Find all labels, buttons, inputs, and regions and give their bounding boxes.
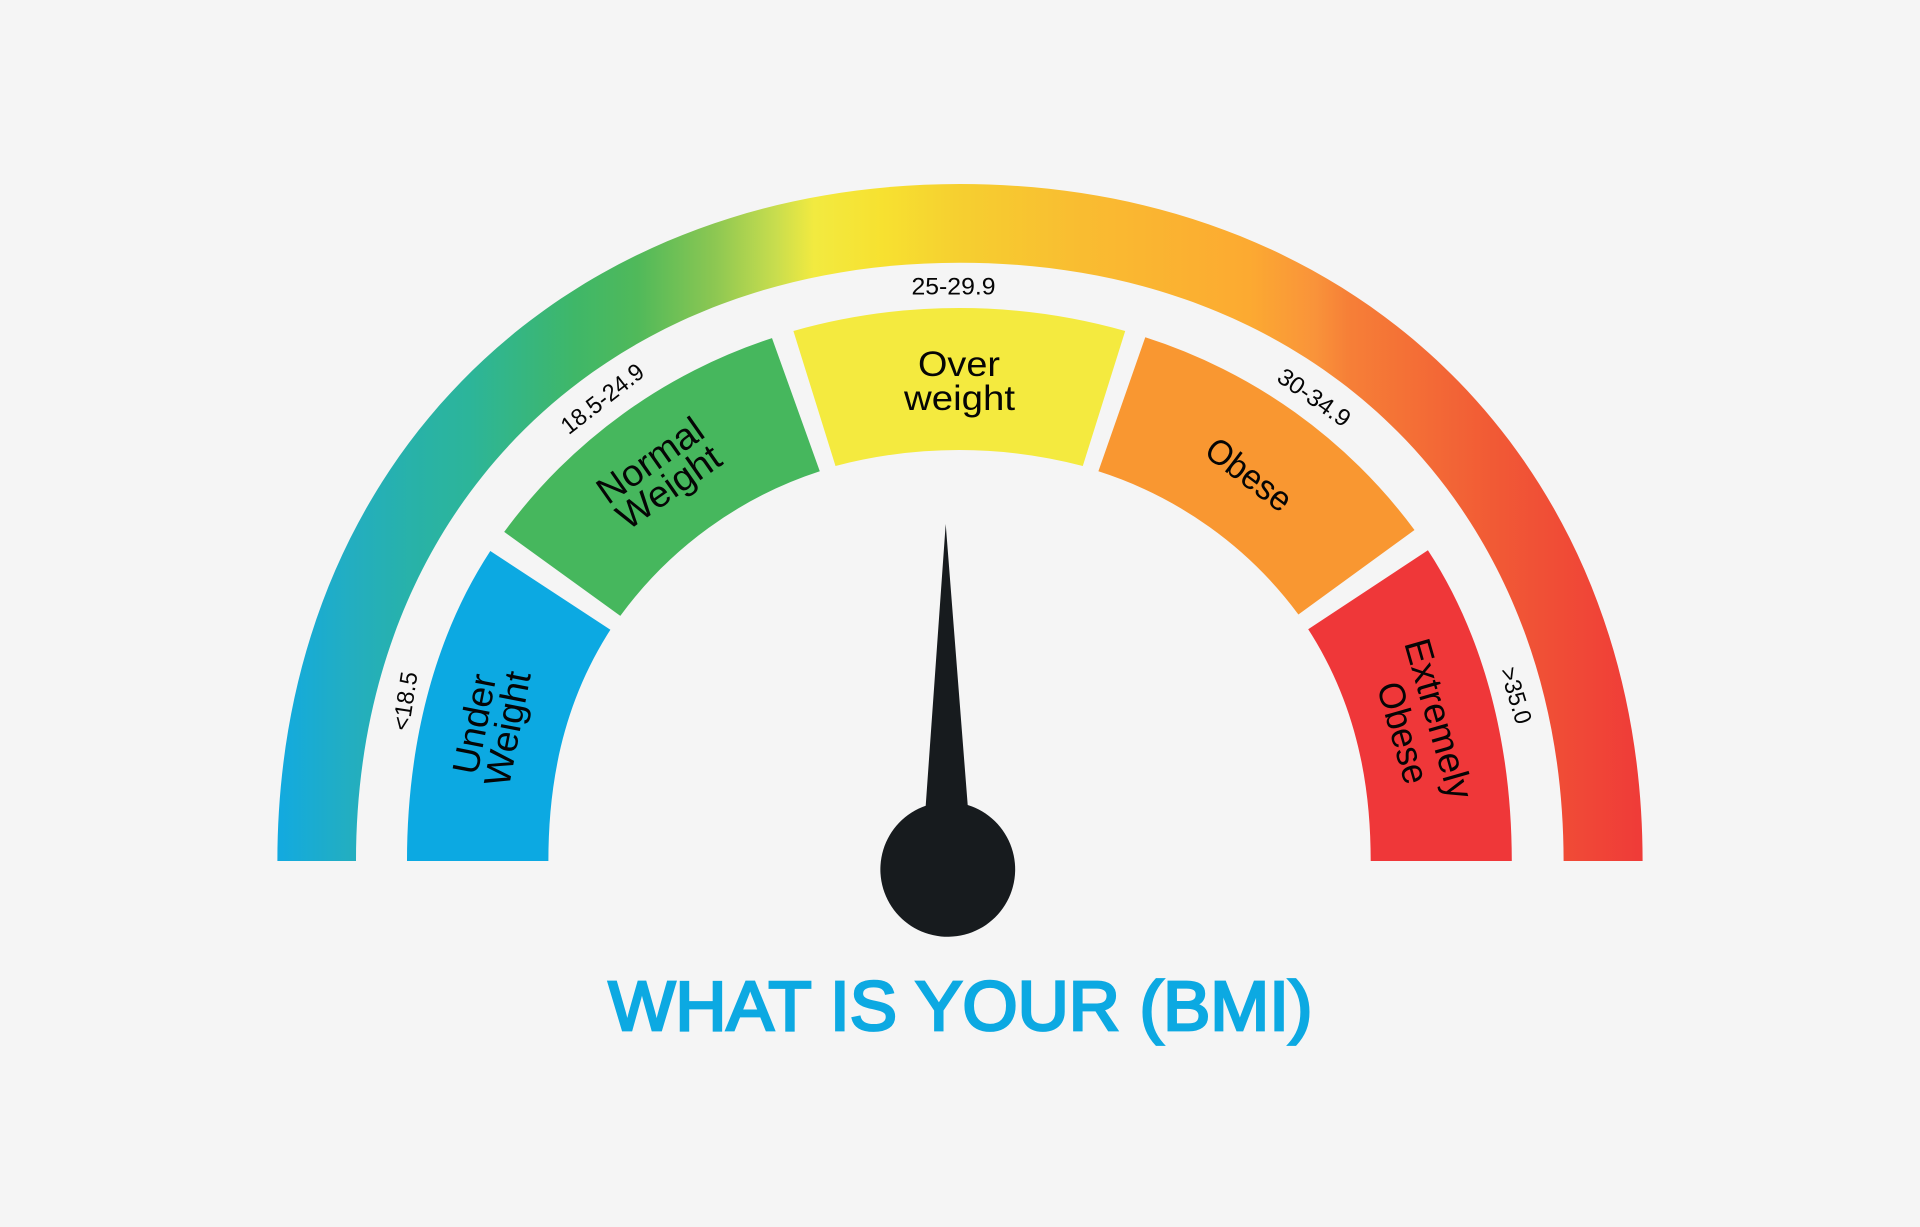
label: extremely: Extremely — [1396, 634, 1481, 804]
gradient outer arc — [277, 184, 1643, 861]
title: WHAT IS YOUR (BMI) — [608, 967, 1312, 1045]
segment: over weight — [793, 308, 1125, 466]
range label: 18.5-24.9: 18.5-24.9 — [556, 358, 650, 440]
label: obese: Obese — [1369, 677, 1437, 788]
segment: normal weight — [504, 338, 820, 616]
gauge needle — [880, 524, 1015, 937]
segment: under weight — [407, 551, 610, 861]
range label: 30-34.9: 30-34.9 — [1272, 363, 1356, 433]
label: weight: Weight — [476, 667, 539, 790]
range label: under 18.5: <18.5 — [388, 670, 424, 732]
label: weight: weight — [903, 379, 1015, 418]
range label: over 35.0: >35.0 — [1494, 664, 1537, 727]
label: normal: Normal — [589, 409, 711, 512]
label: obese: Obese — [1198, 430, 1300, 520]
label: over: Over — [918, 345, 1000, 384]
label: weight: Weight — [609, 436, 729, 538]
segment: obese — [1098, 337, 1414, 614]
segment: extremely obese — [1308, 550, 1512, 861]
range label: 25-29.9: 25-29.9 — [912, 274, 996, 301]
label: under: Under — [445, 671, 504, 778]
